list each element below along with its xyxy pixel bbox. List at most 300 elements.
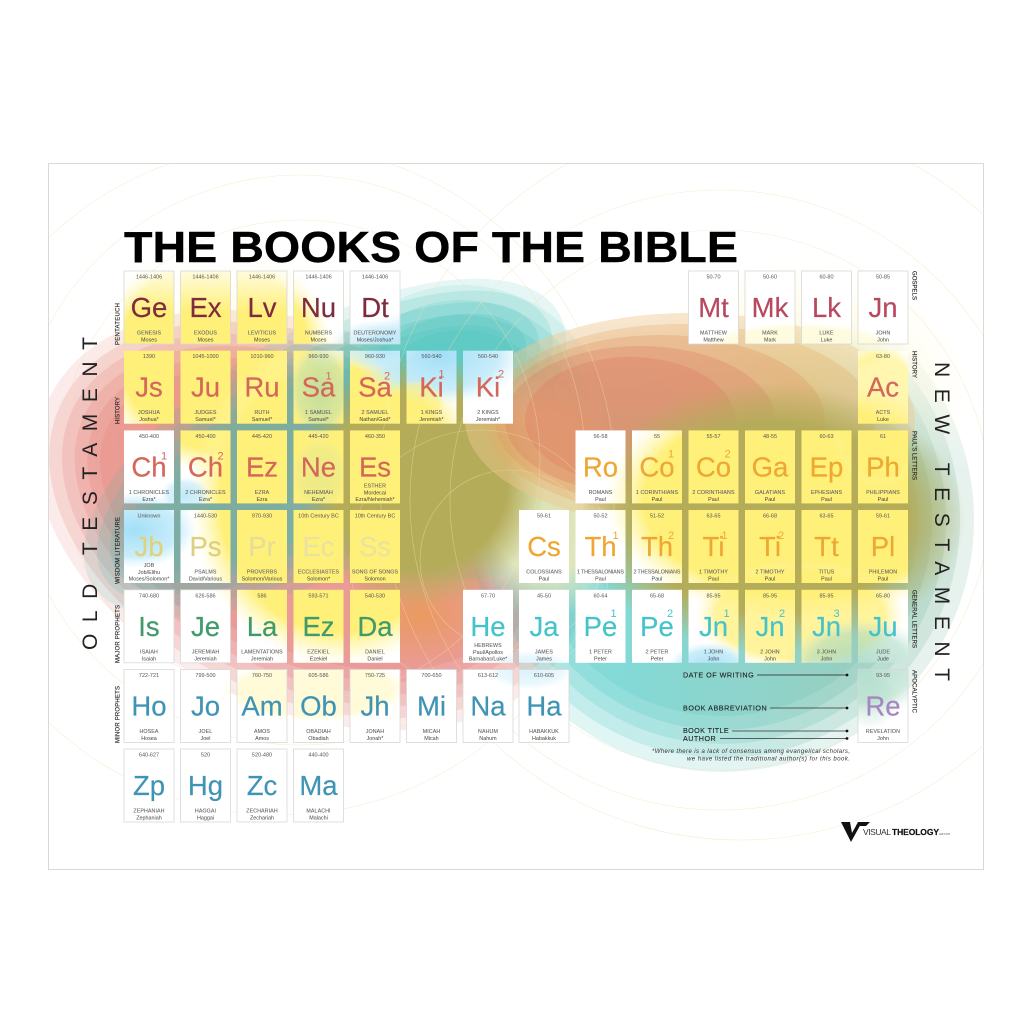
cell: Jonah: JONAH	[366, 729, 384, 735]
cell: 2 Peter: Peter	[651, 656, 664, 662]
cell: James: James	[536, 656, 552, 662]
cell: Colossians	[526, 514, 562, 582]
legend: book abbreviation: BOOK ABBREVIATION	[683, 704, 767, 712]
cell: Exodus: EXODUS	[194, 330, 217, 336]
cell: Lamentations: LAMENTATIONS	[241, 649, 283, 655]
cell: Romans: Ro	[583, 451, 618, 482]
cell: Habakkuk: 610-605	[534, 673, 554, 679]
cell: 1 Corinthians: Co	[639, 451, 675, 482]
cell: Ephesians: EPHESIANS	[811, 490, 842, 496]
cell: John: 50-85	[876, 274, 890, 280]
cell: Leviticus: Lv	[247, 292, 277, 323]
cell: 2 Samuel: Nathan/Gad*	[359, 417, 391, 423]
side label: Paul's Letters: PAUL'S LETTERS	[910, 431, 916, 480]
cell: 1 Corinthians	[636, 434, 678, 503]
cell: 1 Timothy: 63-65	[706, 514, 721, 520]
legend: date of writing: DATE OF WRITING	[683, 670, 754, 680]
cell: Titus: Tt	[814, 531, 839, 562]
cell: 1 Chronicles: 1 CHRONICLES	[129, 490, 170, 496]
cell: Ecclesiastes	[298, 514, 339, 582]
cell: Jeremiah	[180, 590, 230, 663]
cell: 2 Corinthians: 2 CORINTHIANS	[692, 490, 735, 496]
cell: Jonah: 750-725	[365, 673, 385, 679]
cell: Zechariah: Zechariah	[250, 816, 274, 822]
cell: Ecclesiastes: Solomon*	[307, 576, 331, 582]
cell: Joel: Joel	[201, 736, 210, 742]
logo: Visual Theology: GROUP	[939, 833, 950, 836]
cell: 2 Peter: 65-68	[650, 593, 664, 599]
cell: 2 Timothy	[755, 514, 785, 582]
cell: Titus: Paul	[821, 576, 832, 582]
cell: 1 Chronicles	[129, 434, 170, 503]
cell: Daniel: Daniel	[367, 656, 383, 662]
cell: Nahum: 613-612	[478, 673, 498, 679]
legend	[683, 670, 848, 743]
title: THE BOOKS OF THE BIBLE	[124, 223, 738, 272]
cell: Job: Unknown	[138, 514, 160, 520]
cell: Obadiah: Obadiah	[308, 736, 329, 742]
cell: Obadiah: OBADIAH	[306, 729, 331, 735]
legend: book title: BOOK TITLE	[683, 726, 729, 735]
side label: Apocalyptic: APOCALYPTIC	[910, 670, 916, 714]
cell: Colossians: Paul	[539, 576, 549, 582]
cell: 1 John: 85-95	[706, 593, 721, 599]
cell: 1 Kings: Ki	[419, 372, 444, 403]
cell: Colossians: 59-61	[537, 514, 551, 520]
cell: 1 Thessalonians: 50-52	[593, 514, 608, 520]
footnote	[652, 749, 850, 762]
cell: Proverbs	[242, 514, 283, 582]
cell: Revelation: REVELATION	[866, 729, 900, 735]
cell: Lamentations: La	[247, 611, 278, 642]
cell: Proverbs: 970-930	[252, 514, 272, 520]
cell: Habakkuk: HABAKKUK	[529, 729, 559, 735]
cell: Joshua: JOSHUA	[138, 410, 160, 416]
cell: 3 John: John	[821, 656, 832, 662]
cell: Ruth: RUTH	[254, 410, 270, 416]
cell: 2 Peter: 2 PETER	[646, 649, 668, 655]
cell: Judges: Ju	[191, 372, 220, 403]
side label: History NT: HISTORY	[910, 351, 916, 378]
cell: Obadiah: Ob	[300, 690, 337, 722]
cell: Matthew: 50-70	[706, 274, 721, 280]
cell: 2 Chronicles	[185, 434, 226, 503]
cell: Hosea	[124, 670, 174, 742]
cell: Ephesians: Ep	[810, 451, 843, 482]
cell: 1 Corinthians: 1 CORINTHIANS	[636, 490, 678, 496]
cell: John	[858, 271, 908, 344]
cell: James: Ja	[529, 611, 559, 642]
cell: 2 John	[755, 593, 785, 662]
cell: Malachi: Ma	[299, 770, 338, 801]
cell: 1 Samuel: 1 SAMUEL	[305, 410, 332, 416]
cell: Daniel: 540-530	[365, 593, 385, 599]
cell: 2 Timothy: Ti	[759, 531, 781, 562]
cell: Hebrews: Paul/Apollos	[473, 650, 503, 656]
cell: Galatians: 48-55	[763, 434, 777, 440]
cell: Philippians: PHILIPPIANS	[866, 490, 900, 496]
cell: 2 Samuel: 2	[384, 371, 390, 383]
cell: Genesis	[124, 271, 174, 344]
cell: Proverbs: PROVERBS	[247, 570, 277, 576]
cell: Leviticus: Moses	[254, 338, 270, 344]
cell: Ezra: Ezra	[256, 497, 268, 503]
cell: Jonah: Jonah*	[367, 736, 384, 742]
cell: Philippians	[866, 434, 900, 503]
cell: John: Jn	[868, 292, 898, 323]
cell: Romans: Paul	[595, 497, 606, 503]
cell: 1 John	[699, 593, 730, 662]
cell: Malachi: 440-400	[308, 752, 329, 758]
cell: Isaiah: 740-680	[139, 593, 159, 599]
cell: 2 John: Jn	[755, 611, 785, 642]
cell: Ezekiel: EZEKIEL	[307, 649, 330, 655]
cell: Luke: Lk	[812, 292, 841, 323]
cell: Song of Songs: Solomon	[364, 576, 386, 582]
cell: 1 Samuel: 1	[326, 371, 332, 383]
cell: Deuteronomy	[350, 271, 400, 344]
side label: History: HISTORY	[116, 397, 122, 424]
cell: 2 Peter	[640, 593, 674, 662]
footnote: *Where there is a lack of consensus among evangelical scholars,	[652, 749, 850, 755]
cell: Esther: Es	[359, 451, 391, 482]
cell: John: John	[877, 338, 889, 344]
cell: John: JOHN	[876, 330, 890, 336]
cell: Numbers: 1446-1406	[305, 274, 332, 280]
cell: Joel: JOEL	[199, 729, 212, 735]
cell: 2 Corinthians: 2	[724, 448, 731, 460]
cell: Esther: Ezra/Nehemiah*	[355, 497, 396, 503]
cell: Zephaniah: 640-627	[139, 752, 159, 758]
cell: 2 Corinthians	[692, 434, 735, 503]
cell: Philemon: Paul	[878, 576, 888, 582]
cell: Luke: 60-80	[819, 274, 834, 280]
cell: Job: JOB	[144, 563, 155, 569]
cell: Nehemiah: Ne	[301, 451, 336, 482]
cell: 1 Thessalonians: Paul	[595, 576, 606, 582]
cell: Nahum: Na	[470, 690, 506, 722]
cell: 1 Chronicles: Ch	[131, 451, 167, 482]
cell: Deuteronomy: 1446-1406	[362, 274, 388, 280]
side label: Gospels: GOSPELS	[910, 271, 916, 300]
cell: Jude	[868, 593, 898, 662]
cell: 2 Thessalonians: 2	[668, 530, 674, 542]
side label: Major Prophets: MAJOR PROPHETS	[116, 605, 122, 663]
cell: Psalms	[189, 514, 222, 582]
cell: 1 Kings: 1	[438, 369, 445, 381]
cell: Obadiah	[294, 670, 344, 742]
cell: Galatians: GALATIANS	[755, 490, 785, 496]
cell: Jeremiah: Jeremiah	[194, 656, 217, 662]
cell: 1 Peter: 1	[610, 608, 617, 620]
cell: Galatians: Ga	[752, 451, 789, 482]
cell: Numbers: NUMBERS	[305, 330, 332, 336]
side label: Minor Prophets: MINOR PROPHETS	[116, 686, 122, 743]
cell: Amos: Amos	[255, 736, 269, 742]
cell: 2 Chronicles: 2	[218, 450, 224, 462]
cell: Exodus	[180, 271, 230, 344]
cell: Daniel	[357, 593, 393, 662]
cell: 2 Kings: 2	[498, 369, 504, 381]
cell: 1 Samuel: 960-930	[308, 354, 329, 360]
cell: Zechariah: ZECHARIAH	[246, 808, 278, 814]
cell: Haggai: 520	[201, 752, 210, 758]
cell: 2 Samuel: 960-930	[365, 354, 385, 360]
cell: Song of Songs: SONG OF SONGS	[352, 570, 399, 576]
cell: Nehemiah	[301, 434, 336, 503]
cell: Hosea: Hosea	[141, 736, 157, 742]
cell: 2 Timothy: Paul	[765, 576, 775, 582]
cell: Deuteronomy: Moses/Joshua*	[357, 338, 394, 344]
cell: 2 Kings: Jeremiah*	[476, 417, 501, 423]
cell: Ezekiel: Ez	[302, 611, 335, 642]
cell: Zechariah: Zc	[247, 770, 278, 801]
cell: 2 Peter: 2	[667, 608, 673, 620]
cell: 1 Chronicles: 450-400	[139, 434, 159, 440]
cell: Judges	[191, 354, 220, 423]
cell: Job	[129, 514, 170, 582]
cell: Ephesians	[810, 434, 843, 503]
cell: 1 Thessalonians: 1 THESSALONIANS	[577, 570, 624, 576]
cell: Ruth	[244, 354, 280, 423]
cell: Genesis: Moses	[141, 338, 157, 344]
cell: Matthew: Mt	[698, 292, 729, 323]
side label: Wisdom Literature: WISDOM LITERATURE	[116, 517, 122, 584]
cell: 1 John: 1	[724, 608, 730, 620]
cell: Romans	[583, 434, 618, 503]
cell: Zephaniah: Zp	[133, 770, 165, 801]
cell: 3 John: 3	[834, 608, 840, 620]
cell: Ezra	[246, 434, 278, 503]
cell: 1 Corinthians: 55	[654, 434, 660, 440]
cell: Luke: Luke	[821, 338, 832, 344]
cell: Amos: AMOS	[254, 729, 270, 735]
cell: Leviticus	[237, 271, 287, 344]
cell: Mark: Mk	[752, 292, 789, 323]
cell: Ezekiel: 593-571	[308, 593, 329, 599]
cell: Revelation	[858, 670, 908, 742]
cell: 3 John: 85-95	[819, 593, 834, 599]
cell: 2 Kings: 2 KINGS	[477, 410, 499, 416]
cell: Proverbs: Solomon/Various	[242, 576, 283, 582]
cell: 1 Kings	[419, 354, 445, 423]
cell: 2 Chronicles: 2 CHRONICLES	[185, 490, 226, 496]
cell: Habakkuk: Habakkuk	[532, 736, 556, 742]
cell: 2 Kings: 560-540	[478, 354, 498, 360]
cell: Job: Moses/Solomon*	[129, 576, 170, 582]
cell: 2 Chronicles: Ch	[188, 451, 223, 482]
cell: 1 Thessalonians	[577, 514, 624, 582]
cell: Revelation: John	[877, 736, 889, 742]
cell: Ezra: EZRA	[255, 490, 270, 496]
cell: Song of Songs: Ss	[359, 531, 391, 562]
cell: 1 Timothy: 1	[722, 530, 728, 542]
cell: Judges: 1045-1000	[192, 354, 219, 360]
cell: Matthew: Matthew	[703, 338, 724, 344]
cell: 1 Corinthians: Paul	[652, 497, 662, 503]
cell: Zephaniah: ZEPHANIAH	[133, 808, 165, 814]
cell: 1 Chronicles: 1	[161, 450, 167, 462]
cell: 2 Corinthians: Paul	[708, 497, 719, 503]
cell: Colossians: COLOSSIANS	[526, 570, 562, 576]
section label: Old Testament: OLD TESTAMENT	[79, 337, 102, 650]
cell: Malachi: MALACHI	[306, 808, 331, 814]
cell: Amos: Am	[241, 690, 283, 722]
cell: Jonah	[350, 670, 400, 742]
cell: Jeremiah: Je	[191, 611, 220, 642]
cell: Jude: JUDE	[876, 649, 890, 655]
cell: Zephaniah	[124, 749, 174, 822]
cell: 1 Kings: 560-540	[421, 354, 442, 360]
cell: Joel: Jo	[191, 690, 220, 722]
cell: 1 Timothy: Paul	[708, 576, 719, 582]
cell: 1 Corinthians: 1	[668, 448, 674, 460]
cell: 2 Timothy: 66-68	[763, 514, 777, 520]
cell: James	[529, 593, 559, 662]
cell: Hebrews: He	[470, 611, 506, 642]
cell: Joshua: Joshua*	[139, 417, 160, 423]
cell: 2 John: 85-95	[763, 593, 777, 599]
cell: Hosea: Ho	[131, 690, 167, 722]
cell: Hosea: HOSEA	[139, 729, 159, 735]
cell: Micah: 700-650	[421, 673, 442, 679]
cell: Jeremiah: 626-586	[195, 593, 216, 599]
cell: 1 Timothy	[699, 514, 728, 582]
cell: Philemon: 59-61	[876, 514, 890, 520]
cell: 2 Peter: Pe	[640, 611, 674, 642]
cell: Genesis: Ge	[131, 292, 167, 323]
cell: Malachi: Malachi	[309, 816, 328, 822]
cell: Jude: Jude	[877, 656, 889, 662]
poster sheet	[48, 164, 984, 870]
cell: Titus: 63-65	[819, 514, 834, 520]
cell: 2 Thessalonians: 2 THESSALONIANS	[634, 570, 681, 576]
cell: Esther: 460-350	[365, 434, 385, 440]
cell: 1 Samuel	[302, 354, 336, 423]
cell: Judges: JUDGES	[194, 410, 217, 416]
cell: Micah: Micah	[424, 736, 439, 742]
cell: Mark: 50-60	[763, 274, 777, 280]
cell: Hebrews: 67-70	[481, 593, 495, 599]
cell: Psalms: 1440-530	[194, 514, 217, 520]
cell: Nehemiah: Ezra*	[312, 497, 326, 503]
cell: Numbers: Moses	[311, 338, 327, 344]
cell: Psalms: Ps	[189, 531, 222, 562]
cell: 2 Samuel	[358, 354, 393, 423]
cell: Lamentations: 586	[257, 593, 267, 599]
cell: Hosea: 722-721	[139, 673, 159, 679]
cell: Exodus: Ex	[189, 292, 222, 323]
footnote: we have listed the traditional author(s) for this book.	[687, 756, 850, 762]
cell: 2 Thessalonians	[634, 514, 681, 582]
cell: Ecclesiastes: ECCLESIASTES	[298, 570, 339, 576]
cell: Exodus: 1446-1406	[192, 274, 219, 280]
cell: Revelation: Re	[865, 690, 901, 722]
cell: Ephesians: Paul	[821, 497, 832, 503]
cell: Nahum: Nahum	[479, 736, 497, 742]
cell: 2 Timothy: 2 TIMOTHY	[755, 570, 785, 576]
cell: Genesis: GENESIS	[137, 330, 161, 336]
cell: Mark: Mark	[764, 338, 776, 344]
cell: 2 John: 2 JOHN	[760, 649, 780, 655]
cell: Zechariah: 520-480	[252, 752, 272, 758]
cell: Nahum	[463, 670, 513, 742]
cell: Ecclesiastes: Ec	[302, 531, 335, 562]
cell: Song of Songs	[352, 514, 399, 582]
cell: 1 Thessalonians: 1	[612, 530, 619, 542]
cell: 2 Thessalonians: Th	[641, 531, 673, 562]
cell: Ezra: 445-420	[252, 434, 272, 440]
cell: Acts: Ac	[867, 372, 899, 403]
cell: Galatians	[752, 434, 789, 503]
cell: Nehemiah: 445-420	[308, 434, 329, 440]
cell: Luke: LUKE	[819, 330, 834, 336]
cell: Lamentations: Jeremiah	[251, 656, 273, 662]
cell: 2 John: 2	[779, 608, 785, 620]
cell: Isaiah: Is	[138, 611, 160, 642]
cell: Song of Songs: 10th Century BC	[355, 514, 395, 520]
cell: 1 John: John	[708, 656, 719, 662]
cell: Job: Jb	[134, 531, 164, 562]
cell: Titus	[814, 514, 839, 582]
cell: Leviticus: LEVITICUS	[248, 330, 277, 336]
cell: Judges: Samuel*	[195, 417, 217, 423]
cell: Micah	[406, 670, 456, 742]
cell: Exodus: Moses	[198, 338, 214, 344]
cell: Malachi	[294, 749, 344, 822]
cell: Jude: 65-80	[876, 593, 890, 599]
cell: 2 Kings	[476, 354, 504, 423]
cell: Joshua: Js	[135, 372, 163, 403]
cell: Obadiah: 605-586	[308, 673, 329, 679]
cell: 3 John	[812, 593, 841, 662]
side label: General Letters: GENERAL LETTERS	[910, 590, 916, 648]
cell: Haggai: Hg	[188, 770, 223, 801]
cell: Haggai: HAGGAI	[195, 808, 216, 814]
cell: Galatians: Paul	[765, 497, 775, 503]
cell backgrounds	[124, 272, 908, 816]
logo: Visual Theology: THEOLOGY	[892, 827, 939, 837]
cell: Hebrews	[469, 593, 508, 662]
cell: Ruth: 1010-960	[250, 354, 274, 360]
cell: Nehemiah: NEHEMIAH	[304, 490, 333, 496]
cell: Zephaniah: Zephaniah	[136, 816, 162, 822]
cell: Nahum: NAHUM	[478, 729, 498, 735]
cell: Matthew	[688, 271, 738, 344]
cell: Haggai	[180, 749, 230, 822]
cell: Esther: ESTHER	[364, 483, 386, 489]
cell: Habakkuk: Ha	[526, 690, 562, 722]
cell: Proverbs: Pr	[248, 531, 276, 562]
cell: James: 45-50	[537, 593, 551, 599]
cell: Hebrews: Barnabas/Luke*	[469, 656, 508, 662]
cell: Hebrews: HEBREWS	[474, 643, 502, 649]
cell: Philemon: Pl	[871, 531, 895, 562]
cell: Ecclesiastes: 10th Century BC	[298, 514, 339, 520]
cell: Joel	[180, 670, 230, 742]
cell: 2 Chronicles: 450-400	[195, 434, 216, 440]
cell: 2 Timothy: 2	[778, 530, 784, 542]
background: overlapping coloured rings	[49, 164, 983, 840]
cell: Acts: ACTS	[876, 410, 891, 416]
cell: Joel: 799-500	[195, 673, 216, 679]
logo: Visual Theology	[841, 822, 950, 842]
cell: 1 Peter	[584, 593, 617, 662]
cell: Romans: ROMANS	[589, 490, 613, 496]
cell: Jude: Ju	[868, 611, 898, 642]
cell: 1 John: Jn	[699, 611, 728, 642]
cell: Joshua	[135, 354, 163, 423]
